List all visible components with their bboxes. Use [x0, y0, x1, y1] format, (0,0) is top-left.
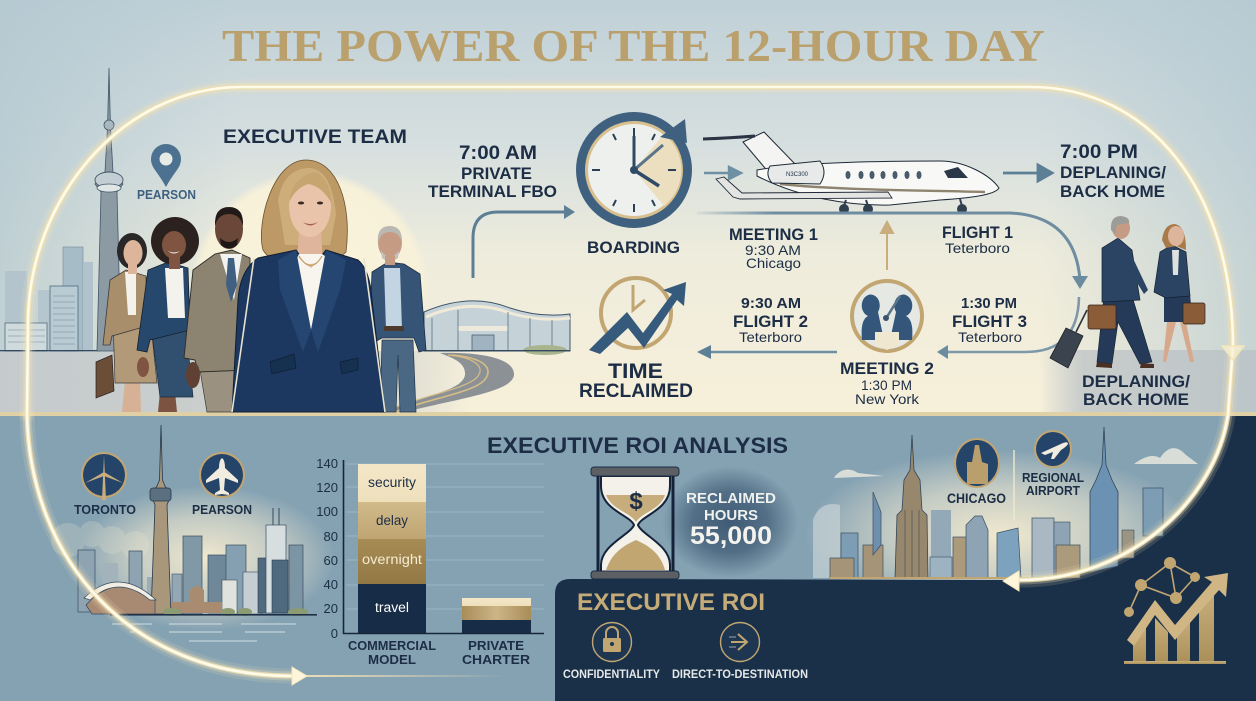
icon: confidentiality lock [592, 622, 632, 662]
text block: 7:00 AM private terminal [428, 143, 557, 201]
icon: Chicago badge [954, 438, 1000, 488]
person: woman in tan suit [96, 233, 157, 412]
text block: meeting 2 [840, 359, 934, 407]
label: Toronto: TORONTO [74, 502, 136, 517]
icon: Toronto badge [81, 452, 127, 500]
illustration: walking couple [1050, 216, 1205, 368]
text block: flight 3: FLIGHT 3 [952, 312, 1027, 331]
bar: commercial model: travel [375, 600, 409, 615]
title: THE POWER OF THE 12-HOUR DAY [222, 21, 1045, 71]
text block: flight 3 [952, 295, 1027, 345]
illustration: terminal building and road [385, 301, 570, 412]
y axis labels: 0 [331, 626, 338, 641]
text block: 7:00 PM: DEPLANING/ [1060, 163, 1166, 182]
person: woman walking [1154, 224, 1205, 362]
text block: meeting 1: Chicago [746, 255, 801, 271]
icon: hourglass [591, 466, 798, 579]
text block: 7:00 AM private terminal: TERMINAL FBO [428, 182, 557, 201]
label: confidentiality: CONFIDENTIALITY [563, 669, 660, 681]
bar: private charter [462, 598, 531, 633]
bar: commercial model: security [368, 475, 416, 490]
icon: growth chart [1124, 557, 1228, 664]
person: grey-haired man right [369, 226, 426, 412]
icon: Pearson pin [137, 144, 196, 202]
illustration: private jet [703, 132, 999, 214]
text block: reclaimed hours: RECLAIMED [686, 490, 776, 507]
arrow: back to meeting 2 [937, 297, 1079, 359]
text block: meeting 1 [729, 226, 818, 271]
arrowhead: navy corner [1003, 571, 1019, 591]
icon: brown briefcase [1088, 305, 1116, 329]
text block: 7:00 PM: 7:00 PM [1060, 142, 1138, 163]
x axis labels: MODEL [368, 653, 416, 667]
text block: flight 2 [733, 295, 808, 345]
person: man with luggage [1050, 216, 1154, 368]
label: Chicago: CHICAGO [947, 491, 1006, 506]
arrow: clock to plane [704, 167, 741, 179]
Pearson label: PEARSON [137, 187, 196, 202]
x axis labels [348, 639, 530, 667]
text block: meeting 1: MEETING 1 [729, 226, 818, 244]
bar: commercial model: overnight [362, 552, 422, 567]
heading: executive team: EXECUTIVE TEAM [223, 126, 407, 148]
icon: regional airport badge [1034, 430, 1072, 468]
panel: bottom background [0, 412, 1256, 701]
text block: flight 3: 1:30 PM [961, 295, 1017, 312]
label: boarding: BOARDING [587, 239, 680, 257]
text block: 7:00 AM private terminal: 7:00 AM [459, 143, 537, 164]
label: regional airport: REGIONAL [1022, 470, 1084, 485]
label: direct to destination: DIRECT-TO-DESTINATION [672, 669, 808, 681]
label: time reclaimed: RECLAIMED [579, 381, 693, 402]
y axis labels: 120 [316, 480, 338, 495]
y axis labels: 60 [324, 553, 338, 568]
illustration: private jet: N3C300 [786, 171, 808, 178]
y axis labels: 20 [324, 601, 338, 616]
label: Pearson: PEARSON [192, 502, 252, 517]
x axis labels: CHARTER [462, 653, 530, 667]
text block: deplaning bottom: BACK HOME [1083, 390, 1189, 409]
text block: flight 2: 9:30 AM [741, 295, 801, 312]
bar chart: commercial vs private [316, 456, 544, 667]
arrow: terminal to boarding [473, 205, 575, 278]
text block: reclaimed hours: HOURS [704, 507, 758, 524]
bar: commercial model [358, 464, 426, 633]
heading: executive ROI analysis: EXECUTIVE ROI ANALYSIS [487, 433, 788, 458]
label: time reclaimed [579, 360, 693, 402]
text block: meeting 2: 1:30 PM [861, 377, 912, 393]
y axis labels [316, 456, 338, 641]
text block: meeting 1: 9:30 AM [745, 242, 801, 258]
icon: boarding clock [576, 112, 692, 228]
x axis labels: PRIVATE [468, 639, 524, 653]
person: woman in navy suit [137, 217, 199, 412]
text block: 7:00 PM [1060, 142, 1166, 201]
icon: direct to destination [720, 622, 760, 662]
text block: flight 1: Teterboro [945, 240, 1010, 256]
text block: flight 2: Teterboro [739, 329, 802, 345]
text block: meeting 2: MEETING 2 [840, 359, 934, 378]
person: man in beige suit [184, 207, 250, 412]
arrow: plane to deplaning [1003, 165, 1052, 181]
text block: flight 1: FLIGHT 1 [942, 224, 1013, 242]
arrow: meeting 2 to time reclaimed [697, 345, 837, 359]
x axis labels: COMMERCIAL [348, 639, 436, 653]
text block: flight 2: FLIGHT 2 [733, 312, 808, 331]
arrowhead: right side [1222, 346, 1244, 360]
text block: flight 3: Teterboro [958, 329, 1022, 345]
text block: 7:00 PM: BACK HOME [1060, 182, 1165, 201]
text block: reclaimed hours [686, 490, 776, 550]
icon: briefcase [96, 355, 114, 398]
illustration: Toronto skyline bottom [51, 425, 317, 641]
illustration: executive team [96, 160, 426, 412]
icon: rolling suitcase [1050, 328, 1083, 368]
y axis labels: 100 [316, 504, 338, 519]
illustration: US skyline [813, 427, 1198, 579]
icon: meeting 2 [850, 279, 924, 353]
bar: commercial model: delay [376, 513, 408, 528]
y axis labels: 80 [324, 529, 338, 544]
text block: reclaimed hours: 55,000 [690, 522, 772, 550]
heading: executive ROI: EXECUTIVE ROI [577, 589, 765, 616]
y axis labels: 140 [316, 456, 338, 471]
icon: Pearson plane badge [199, 452, 245, 498]
panel: top background [0, 0, 1256, 413]
panel: navy corner [555, 416, 1256, 701]
label: regional airport: AIRPORT [1026, 483, 1080, 498]
arrowhead: bottom left [292, 667, 307, 685]
icon: time reclaimed [589, 278, 686, 354]
text block: meeting 2: New York [855, 391, 920, 407]
arrow: meeting 2 up [881, 222, 893, 270]
person: lead woman [232, 160, 385, 412]
illustration: Toronto skyline top-left [0, 68, 123, 351]
text block: flight 1 [942, 224, 1013, 256]
text block: deplaning bottom: DEPLANING/ [1082, 372, 1190, 391]
label: time reclaimed: TIME [608, 360, 663, 383]
icon: hourglass: $ [629, 488, 643, 515]
text block: deplaning bottom [1082, 372, 1190, 409]
text block: 7:00 AM private terminal: PRIVATE [461, 164, 532, 183]
arrow: ground line to flight 3 [697, 213, 1088, 289]
label: regional airport [1022, 470, 1084, 498]
y axis labels: 40 [324, 577, 338, 592]
